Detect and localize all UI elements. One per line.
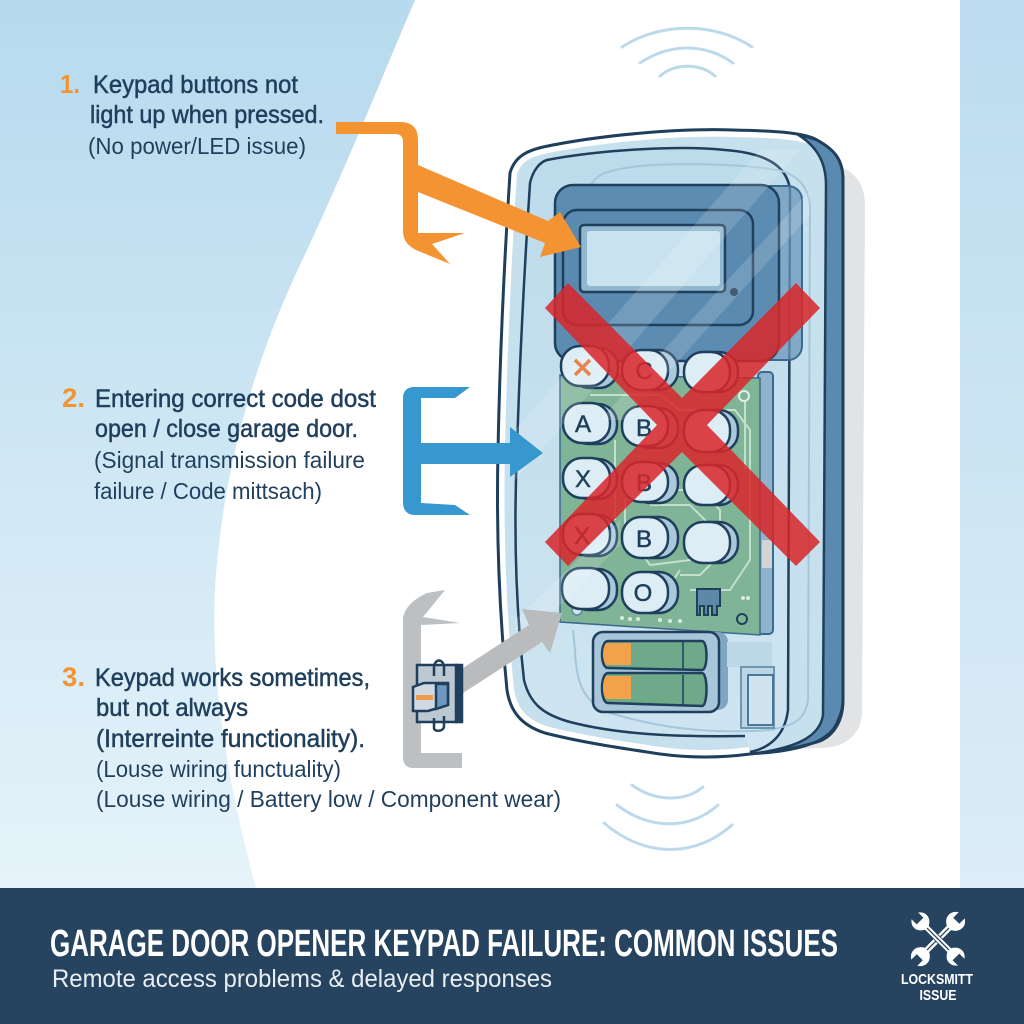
icon: crossed wrenches [908,909,968,969]
button labels [574,358,653,607]
circuit board [560,372,773,635]
signal waves top [622,28,752,76]
footer banner [0,888,1024,1024]
issue 1 text [60,69,324,159]
issue 3 text: 3. [62,662,85,692]
button labels: B [636,415,652,442]
keypad device [497,130,865,757]
button labels: X [575,466,591,493]
issue 3 text: (Louse wiring / Battery low / Component wear) [96,786,561,812]
gray arrow [463,609,562,693]
battery bottom [602,673,706,706]
inner glass ridge [573,164,810,731]
device front glass [515,148,790,752]
issue 1 text: light up when pressed. [90,101,324,129]
issue 3 text: (Louse wiring functuality) [96,756,341,782]
battery compartment [593,632,728,712]
left background wave [0,0,415,888]
blue arrow [403,387,543,515]
screen housing [555,185,802,361]
keypad buttons [561,346,738,613]
right background strip [960,0,1024,888]
button labels: B [636,470,652,497]
orange arrow [336,122,581,264]
issue 2 text: open / close garage door. [95,415,358,443]
issue 2 text [62,383,376,504]
device body [497,130,843,757]
logo text [901,971,973,1004]
signal waves bottom [604,785,732,850]
gray bracket [403,590,462,768]
issue 2 text: 2. [62,383,85,413]
issue 3 text [62,662,561,812]
button labels: C [635,358,653,385]
button labels: O [634,580,652,607]
issue 1 text: 1. [60,69,80,99]
issue 2 text: Entering correct code dost [95,385,376,413]
small compartment door [727,642,774,728]
footer subtitle: Remote access problems & delayed responses [52,965,552,993]
device shadow [740,165,865,752]
battery top [602,641,706,670]
device side band [750,134,843,754]
issue 2 text: failure / Code mittsach) [94,478,322,504]
issue 1 text: Keypad buttons not [93,71,298,99]
issue 3 text: but not always [96,694,248,722]
button labels: X [574,523,590,550]
logo text: ISSUE [920,987,956,1004]
red X mark [545,283,820,566]
issue 1 text: (No power/LED issue) [88,133,306,159]
issue 3 text: Keypad works sometimes, [95,664,370,692]
icon: wiring connector [413,660,462,731]
issue 2 text: (Signal transmission failure [94,447,365,473]
board chip [697,589,720,615]
device outline [497,130,843,757]
issue 3 text: (Interreinte functionality). [96,725,365,753]
button labels: B [636,526,652,553]
board traces [590,395,750,600]
LCD display [580,225,725,292]
button labels: A [575,411,591,438]
indicator LED [730,288,738,296]
glass glare [515,150,810,650]
logo text: LOCKSMITT [901,971,973,988]
glass edge lines [515,148,790,752]
button orange x mark [575,360,590,375]
white rim [497,130,817,757]
